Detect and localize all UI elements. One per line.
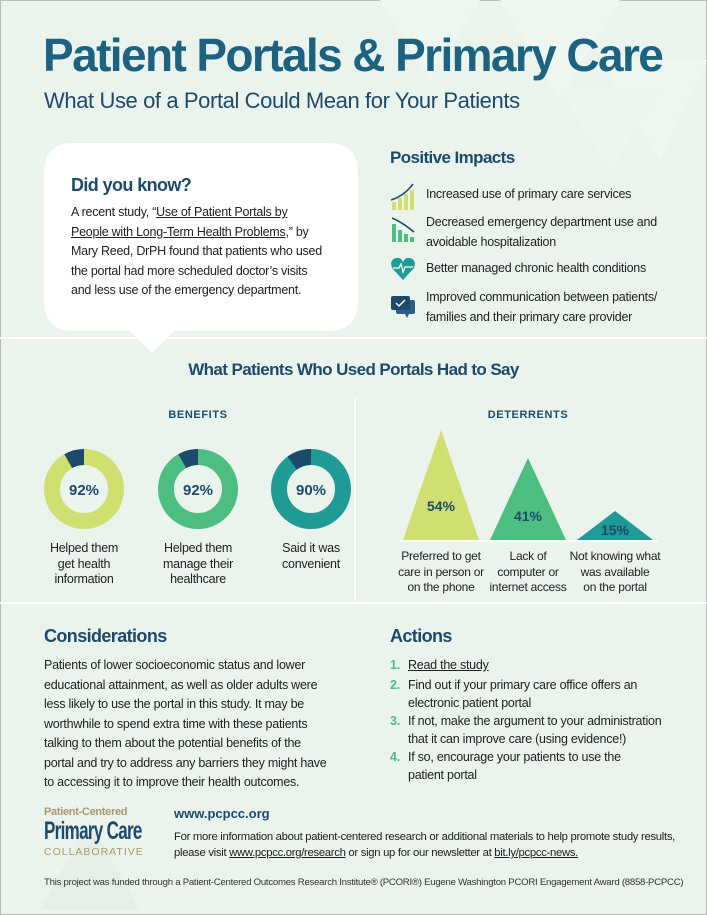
panel: considerations: Considerations [44, 626, 167, 646]
benefit labels: information [54, 572, 114, 586]
text: convenient [282, 556, 340, 570]
panel: actions: 4. [390, 750, 400, 764]
callout: did you know [44, 143, 358, 353]
body text: People with Long-Term Health Problems,” by [71, 224, 309, 238]
deterrent labels: care in person or [398, 564, 484, 578]
benefit labels: Helped them [50, 541, 118, 555]
icon: falling chart [392, 217, 414, 242]
panel: actions: Read the study [408, 658, 489, 672]
text: on the portal [583, 580, 647, 594]
panel: positive impacts: avoidable hospitalization [426, 234, 556, 248]
panel: positive impacts: Increased use of primary care services [426, 187, 631, 201]
body text: Mary Reed, DrPH found that patients who used [71, 244, 322, 258]
panel: positive impacts: Improved communication between patients/ [426, 290, 657, 304]
deterrent labels [398, 549, 484, 594]
footer: website: www.pcpcc.org [174, 806, 270, 821]
deterrent labels: on the phone [407, 580, 475, 594]
panel: positive impacts: Decreased emergency department use and [426, 215, 657, 229]
icon: heart [391, 258, 415, 280]
panel: considerations: Patients of lower socioeconomic status and lower [44, 658, 305, 672]
panel: considerations: educational attainment, as well as older adults were [44, 678, 317, 692]
body text: and less use of the emergency department. [71, 283, 301, 297]
heading: benefits: BENEFITS [168, 409, 228, 421]
text: Not knowing what [570, 549, 660, 563]
text: Helped them [164, 541, 232, 555]
panel: actions: 2. [390, 678, 400, 692]
heading: Positive Impacts [390, 148, 515, 167]
panel: considerations: less likely to use the portal in this study. It may be [44, 697, 304, 711]
title: Patient Portals & Primary Care [43, 29, 662, 81]
panel: positive impacts: families and their primary care provider [426, 310, 632, 324]
text: to accessing it to improve their health outcomes. [44, 775, 299, 789]
text: Said it was [282, 541, 340, 555]
funding note: This project was funded through a Patient-Centered Outcomes Research Institute® (PCORI®) Eugene Washington PCORI Engagement Award (8858-PCPCC) [44, 877, 683, 888]
panel: positive impacts: Better managed chronic health conditions [426, 261, 646, 275]
panel: actions: Actions [390, 626, 452, 646]
icon: rising chart [390, 184, 414, 210]
footer text [174, 831, 675, 859]
text: computer or [497, 564, 559, 578]
chart: deterrent triangles [400, 430, 658, 542]
benefit labels [50, 541, 118, 586]
logo [44, 806, 144, 858]
chart: benefit donuts: 90% [296, 482, 326, 499]
logo: Patient-Centered [44, 806, 127, 818]
logo: COLLABORATIVE [44, 846, 144, 858]
panel: positive impacts [390, 148, 658, 324]
chart: benefit donuts: 92% [183, 482, 213, 499]
panel: considerations: portal and try to address any barriers they might have [44, 756, 326, 770]
chart: deterrent triangles: 54% [427, 498, 456, 514]
body text [71, 205, 322, 297]
body text: the portal had more scheduled doctor’s visits [71, 264, 307, 278]
panel: actions: If not, make the argument to your administration [408, 714, 661, 728]
body text: A recent study, “Use of Patient Portals by [71, 205, 287, 219]
panel: considerations: worthwhile to spend extra time with these patients [44, 716, 307, 730]
footer text: please visit www.pcpcc.org/research or sign up for our newsletter at bit.ly/pcpcc-news. [174, 847, 578, 859]
panel: actions: patient portal [408, 768, 477, 782]
text: was available [581, 564, 649, 578]
footer text: For more information about patient-centered research or additional materials to help promote study results, [174, 831, 675, 843]
text: manage their [163, 556, 233, 570]
chart: benefit donuts: 92% [69, 482, 99, 499]
icon: chat [391, 296, 415, 318]
section heading: What Patients Who Used Portals Had to Say [188, 360, 519, 379]
panel: actions: electronic patient portal [408, 696, 531, 710]
panel: considerations [44, 626, 326, 789]
chart: benefit donuts [44, 449, 351, 529]
deterrent labels: Preferred to get [401, 549, 481, 563]
panel: actions: Find out if your primary care office offers an [408, 678, 637, 692]
text: Lack of [510, 549, 546, 563]
benefit labels: get health [58, 556, 110, 570]
panel: actions: that it can improve care (using evidence!) [408, 732, 626, 746]
text: healthcare [170, 572, 226, 586]
panel: actions: 3. [390, 714, 400, 728]
panel: considerations: talking to them about the potential benefits of the [44, 736, 301, 750]
subtitle: What Use of a Portal Could Mean for Your Patients [44, 88, 520, 113]
heading: deterrents: DETERRENTS [488, 409, 568, 421]
panel: actions [390, 626, 661, 782]
panel: actions: If so, encourage your patients to use the [408, 750, 621, 764]
logo: Primary Care [44, 817, 142, 845]
chart: deterrent triangles: 41% [514, 508, 543, 524]
heading: did you know: Did you know? [71, 175, 191, 195]
text: internet access [490, 580, 566, 594]
chart: deterrent triangles: 15% [601, 522, 630, 538]
panel: actions: 1. [390, 658, 400, 672]
